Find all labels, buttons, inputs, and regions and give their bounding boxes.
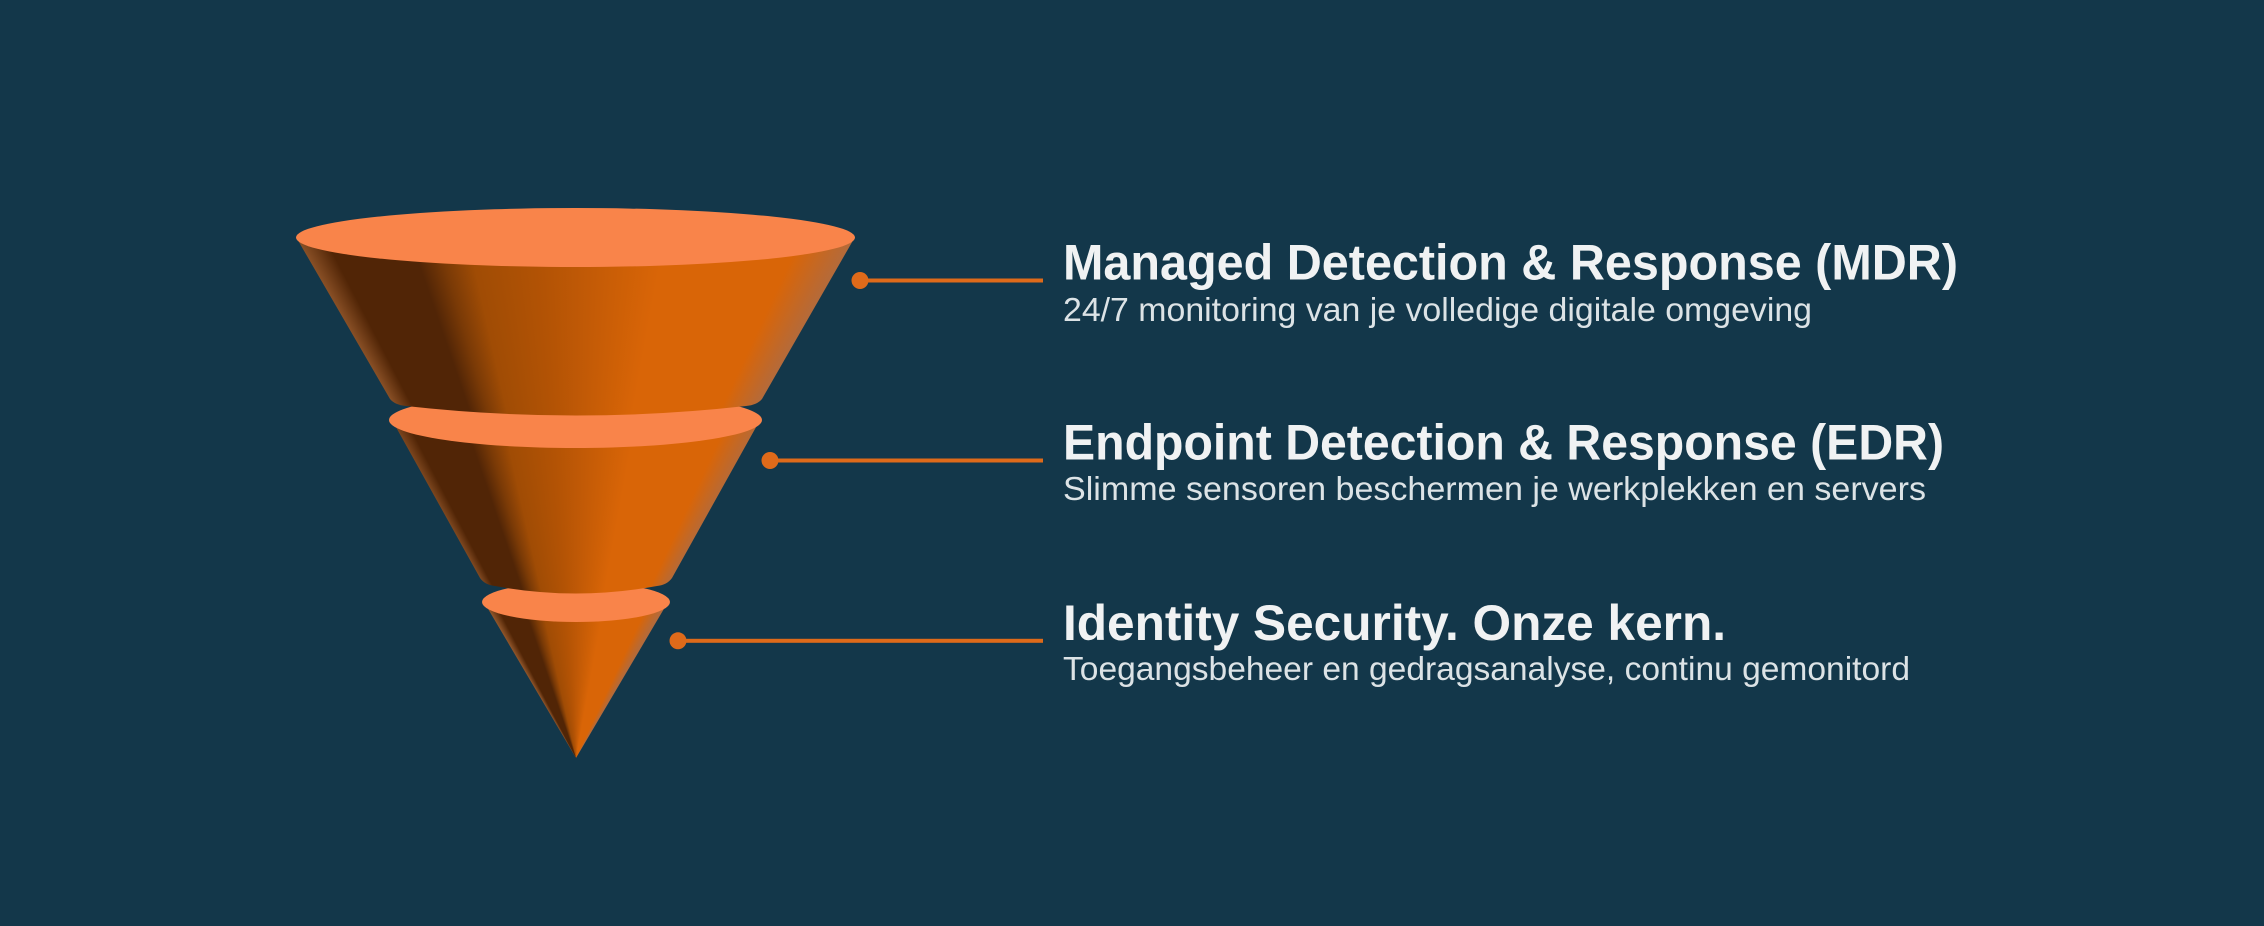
funnel tier 2: top disc [389,392,762,448]
text block: Identity Security [1063,595,1910,687]
funnel diagram [296,208,855,758]
description: Identity Security: Toegangsbeheer en gedragsanalyse, continu gemonitord [1063,650,1910,687]
funnel tier 1: top disc [296,208,854,266]
heading: Identity Security: Identity Security. Onze kern. [1063,595,1726,651]
description: MDR: 24/7 monitoring van je volledige digitale omgeving [1063,291,1812,328]
funnel tier 1: body [290,230,862,420]
text block: MDR [1063,234,1958,328]
funnel tier 3: top disc [482,582,670,622]
connector: EDR [762,452,1043,469]
heading: EDR: Endpoint Detection & Response (EDR) [1063,414,1944,470]
text block: EDR [1063,414,1944,507]
heading: MDR: Managed Detection & Response (MDR) [1063,234,1958,290]
funnel tier 3: cone body [488,609,664,758]
description: EDR: Slimme sensoren beschermen je werkplekken en servers [1063,470,1926,507]
connector: MDR [852,272,1043,289]
connector: Identity Security [670,632,1043,649]
funnel tier 2: body [396,426,756,594]
